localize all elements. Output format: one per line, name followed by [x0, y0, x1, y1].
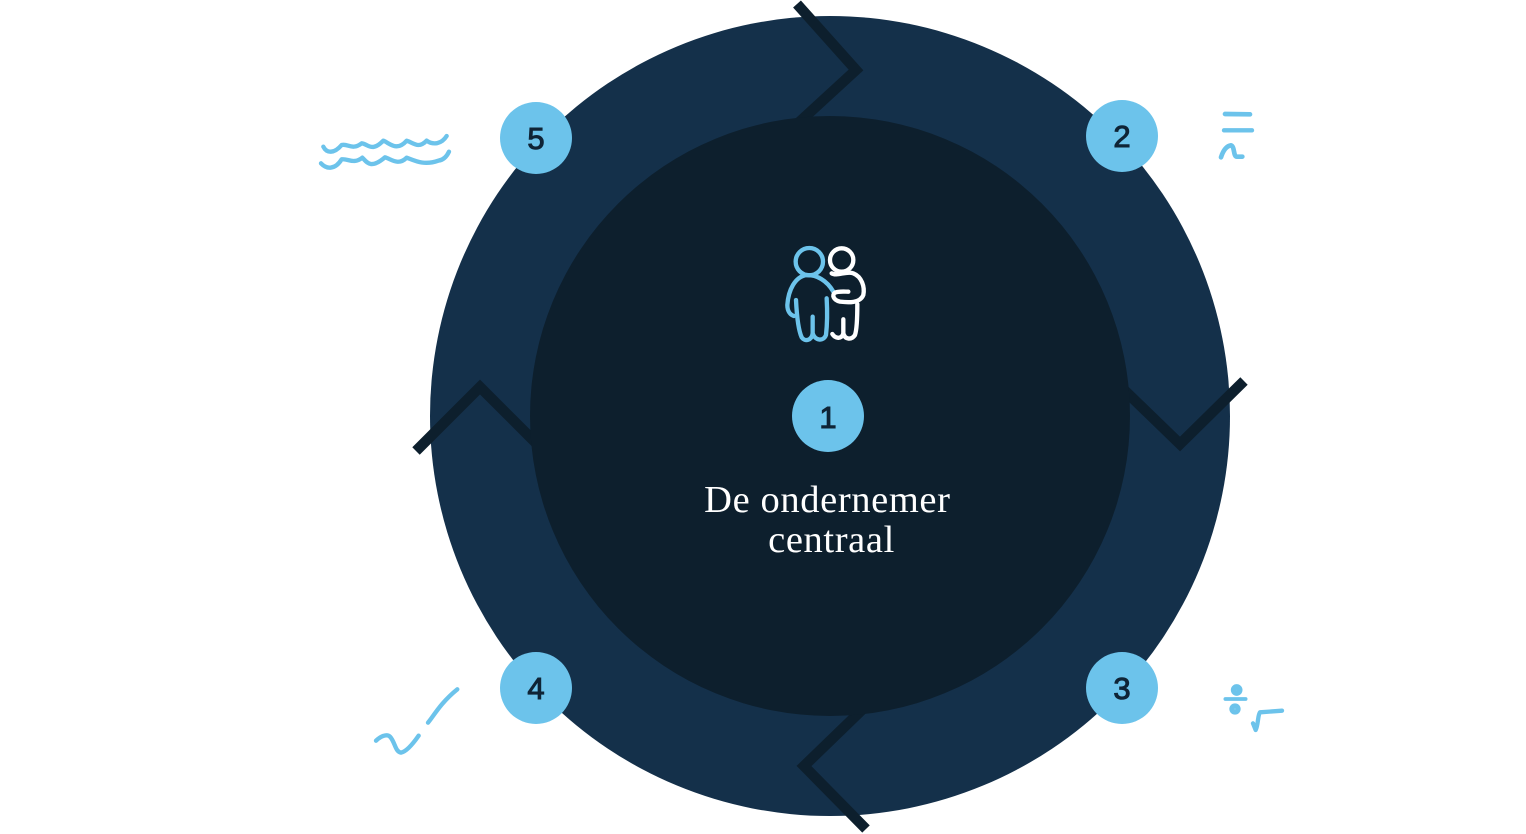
icon part: white person	[830, 248, 864, 339]
arrow: bottom zigzag	[804, 706, 866, 829]
title: De ondernemer centraal: centraal	[768, 519, 895, 561]
badge 2: 2	[1113, 119, 1131, 154]
badge 1	[792, 380, 864, 452]
doodle: divide and root near badge 3	[1225, 687, 1282, 730]
badge 3	[1086, 652, 1158, 724]
badge 1: 1	[819, 400, 837, 435]
badge 3: 3	[1113, 671, 1131, 706]
doodle: curve near badge 4	[376, 689, 457, 753]
arrow: top zigzag	[795, 4, 856, 126]
inner circle	[530, 116, 1130, 716]
title: De ondernemer centraal: De ondernemer	[704, 479, 951, 521]
icon part: blue person	[787, 248, 833, 340]
badge 2	[1086, 100, 1158, 172]
icon: two people	[787, 248, 864, 340]
arrow: right zigzag	[1118, 381, 1244, 444]
badge 5	[500, 102, 572, 174]
doodle: waves near badge 5	[321, 136, 449, 168]
arrow: left zigzag	[416, 387, 542, 451]
outer ring	[430, 16, 1230, 816]
badge 4	[500, 652, 572, 724]
badge 4: 4	[527, 671, 545, 706]
badge 5: 5	[527, 121, 545, 156]
doodle: equals and curl near badge 2	[1221, 114, 1252, 157]
